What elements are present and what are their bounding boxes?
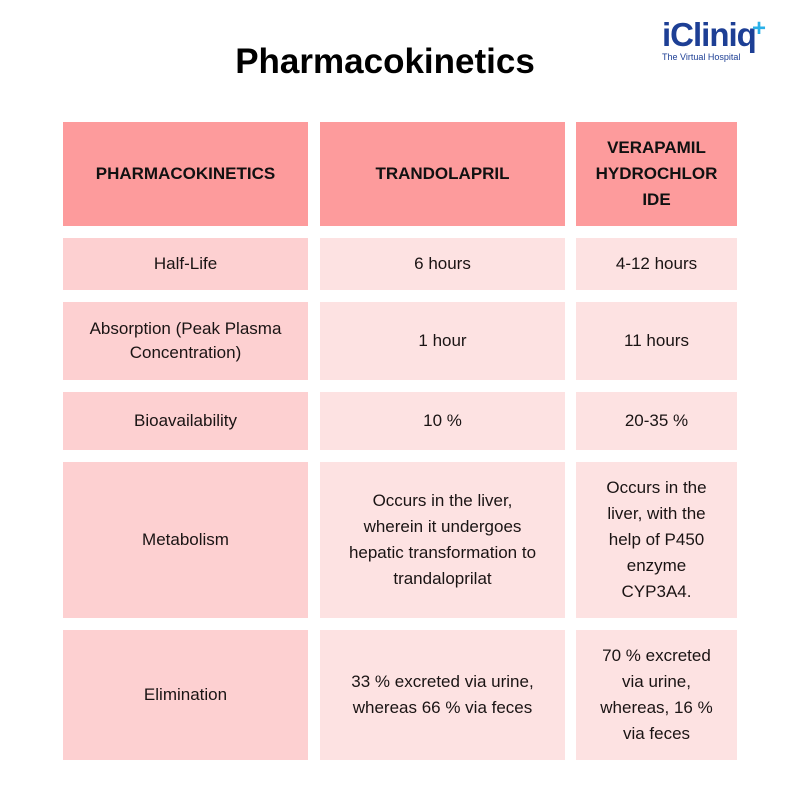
table: via feces (623, 724, 690, 743)
table: 20-35 % (625, 411, 688, 430)
table: hepatic transformation to (349, 543, 536, 562)
table: liver, with the (607, 504, 706, 523)
table: Occurs in the liver, (373, 491, 512, 510)
table: whereas 66 % via feces (353, 698, 532, 717)
table: 33 % excreted via urine, (351, 672, 534, 691)
header row (63, 122, 308, 226)
row: bioavailability (63, 392, 308, 450)
logo: iCliniq (662, 16, 756, 53)
table: trandaloprilat (393, 569, 492, 588)
table: 11 hours (624, 331, 689, 350)
table: 6 hours (414, 254, 471, 273)
table: via urine, (622, 672, 691, 691)
table: 70 % excreted (602, 646, 711, 665)
table: VERAPAMIL HYDROCHLOR IDE (596, 138, 717, 209)
table: whereas, 16 % (600, 698, 713, 717)
table: help of P450 (609, 530, 704, 549)
logo: The Virtual Hospital (662, 52, 740, 62)
table: TRANDOLAPRIL (375, 164, 510, 183)
row: absorption: Absorption (Peak Plasma Concentration) (90, 319, 281, 362)
icon: plus: + (752, 15, 766, 42)
row: bioavailability: Bioavailability (134, 411, 237, 430)
table: 1 hour (418, 331, 467, 350)
header row: PHARMACOKINETICS (96, 164, 275, 183)
row: half-life: Half-Life (154, 254, 217, 273)
row: absorption (63, 302, 308, 380)
table: wherein it undergoes (364, 517, 521, 536)
table: 10 % (423, 411, 462, 430)
table: 4-12 hours (616, 254, 697, 273)
table: enzyme (627, 556, 686, 575)
row: elimination: Elimination (144, 685, 227, 704)
title: Pharmacokinetics (235, 42, 535, 81)
row: elimination (63, 630, 308, 760)
table: Occurs in the (606, 478, 707, 497)
table: CYP3A4. (622, 582, 691, 601)
row: metabolism: Metabolism (142, 530, 229, 549)
row: metabolism (63, 462, 308, 618)
row: half-life (63, 238, 308, 290)
